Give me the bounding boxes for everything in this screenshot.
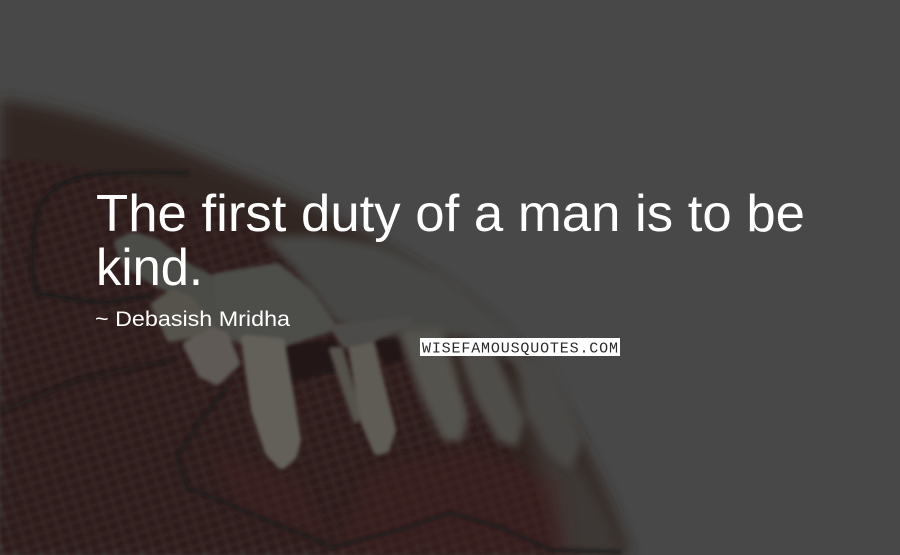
quote line 1: The first duty of a man is to be (96, 185, 805, 243)
football photo (0, 100, 630, 555)
leather texture (0, 160, 580, 555)
quote line 2: kind. (96, 239, 203, 297)
seams (0, 172, 620, 552)
quote text (95, 185, 805, 331)
watermark text: WISEFAMOUSQUOTES.COM (422, 340, 618, 358)
watermark box (420, 338, 620, 356)
laces right (406, 335, 576, 462)
laces upper (263, 235, 530, 372)
dark gaps between laces (285, 337, 402, 385)
watermark (420, 338, 620, 358)
laces lower (118, 236, 410, 464)
reddish highlights (210, 450, 570, 555)
ball body (0, 100, 630, 555)
author: ~ Debasish Mridha (95, 307, 290, 331)
ball edge shading (510, 370, 625, 555)
